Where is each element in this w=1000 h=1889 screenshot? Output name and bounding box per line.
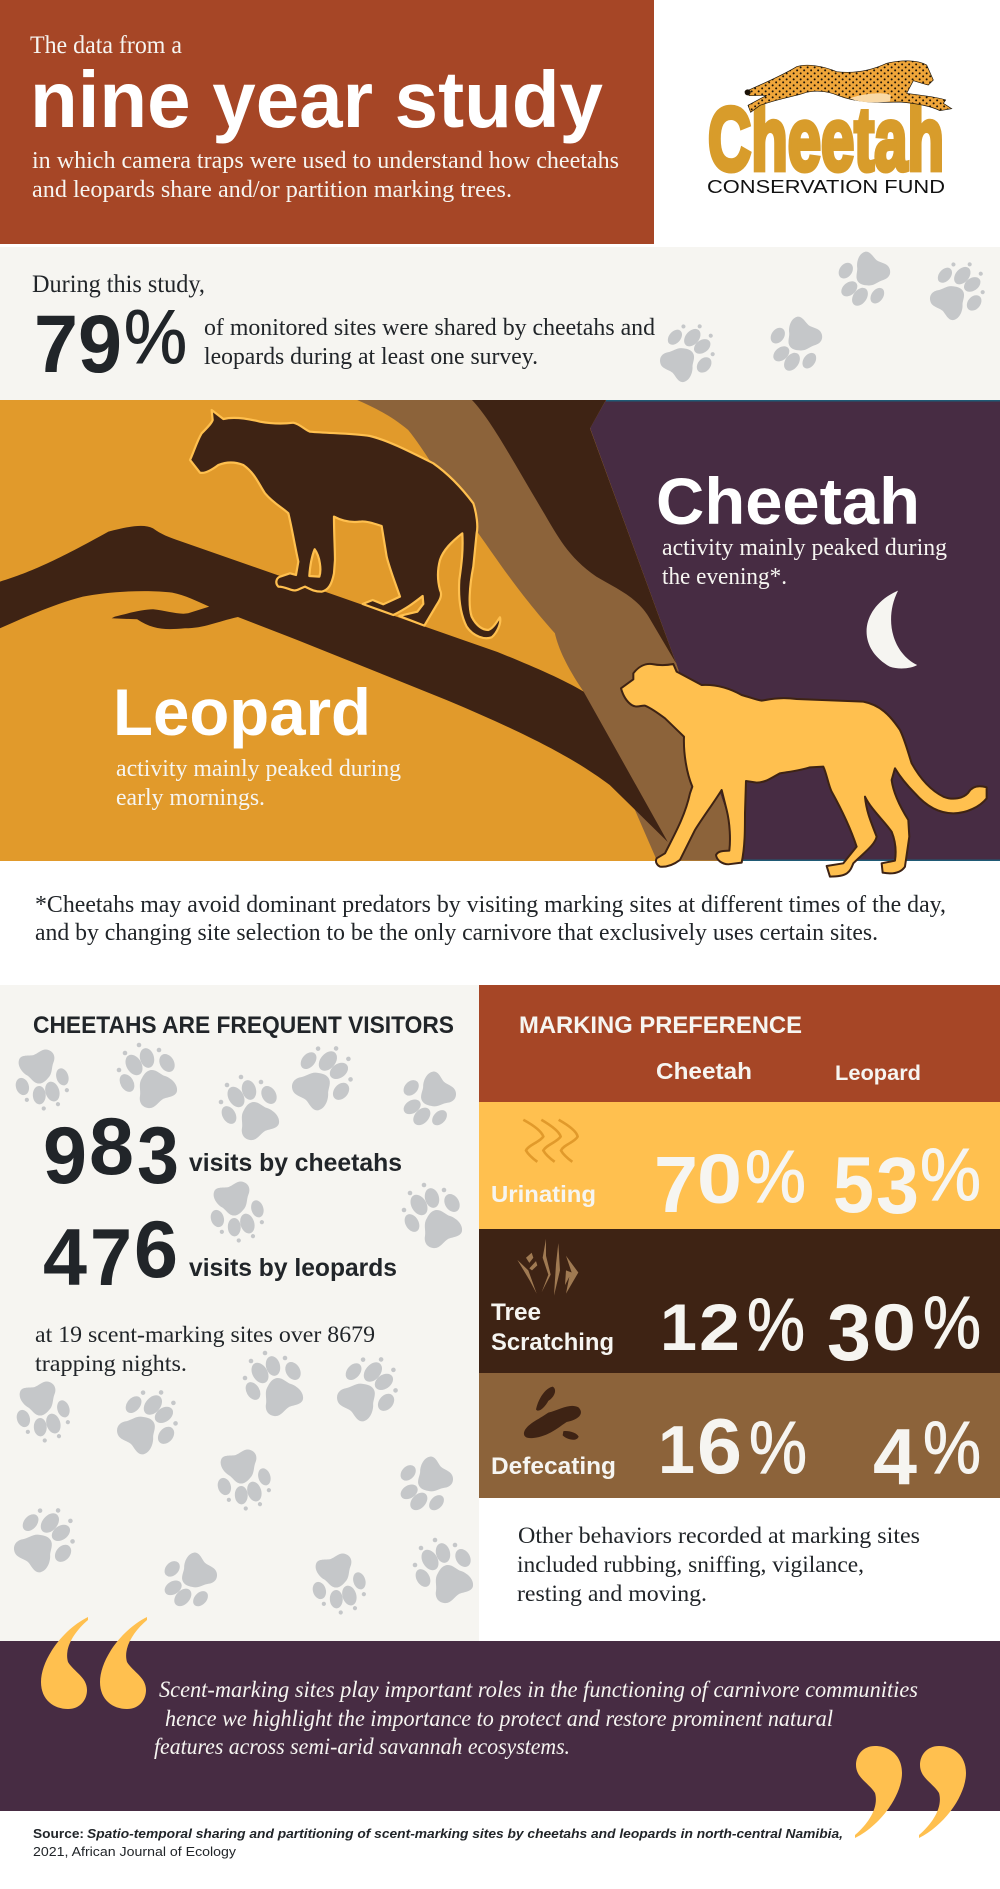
leopard value: 30% xyxy=(827,1281,981,1377)
panel: leopard and cheetah illustration xyxy=(0,400,1000,877)
stat: 476 visits: 6 xyxy=(134,1205,178,1295)
icon: scat xyxy=(524,1387,581,1440)
label: Defecating xyxy=(491,1453,616,1480)
leopard value: 53%: % xyxy=(920,1133,981,1216)
stat: 983 visits: visits by cheetahs xyxy=(189,1149,402,1177)
lead-in text: During this study, xyxy=(32,271,205,298)
column label: leopard: Leopard xyxy=(835,1062,921,1085)
cheetah description: the evening*. xyxy=(662,564,787,590)
row: defecating xyxy=(479,1373,1000,1501)
cheetah value: 70%: % xyxy=(745,1135,806,1218)
header description xyxy=(32,148,619,203)
logo tagline: CONSERVATION FUND xyxy=(707,176,945,197)
cheetah value: 70%: 0 xyxy=(697,1140,742,1218)
quote text: features across semi-arid savannah ecosystems. xyxy=(154,1734,570,1759)
leopard value: 4%: % xyxy=(923,1406,981,1489)
stat: 79%: % xyxy=(124,295,187,380)
survey details xyxy=(35,1322,375,1376)
source citation: 2021, African Journal of Ecology xyxy=(33,1844,237,1859)
stat: 476 visits: 7 xyxy=(90,1213,132,1303)
stat: 79%: 79 xyxy=(34,299,122,390)
cheetah value: 16%: 6 xyxy=(697,1402,742,1490)
leopard silhouette xyxy=(190,410,500,638)
source citation: Spatio-temporal sharing and partitioning of scent-marking sites by cheetahs and leopards in north-central Namibia, xyxy=(87,1826,843,1841)
stat description xyxy=(204,315,655,370)
logo: Cheetah Conservation Fund xyxy=(707,61,952,197)
quote text: Scent-marking sites play important roles in the functioning of carnivore communities xyxy=(159,1677,918,1702)
main title: nine year study xyxy=(30,55,603,144)
tree illustration xyxy=(0,400,743,861)
leopard value: 30%: % xyxy=(923,1281,981,1364)
label: Tree xyxy=(491,1299,541,1326)
cheetah value: 12%: % xyxy=(747,1283,805,1366)
stat: 476 visits: visits by leopards xyxy=(189,1254,397,1282)
heading: MARKING PREFERENCE xyxy=(519,1012,802,1039)
icon: opening quote mark xyxy=(41,1617,147,1709)
other behaviors text xyxy=(517,1523,920,1606)
leopard value: 30%: 0 xyxy=(872,1290,916,1364)
other behaviors text: Other behaviors recorded at marking sites xyxy=(518,1523,920,1548)
footnote: and by changing site selection to be the only carnivore that exclusively uses certain sites. xyxy=(35,920,878,946)
label xyxy=(491,1299,614,1356)
other behaviors text: resting and moving. xyxy=(517,1581,707,1606)
leopard description: activity mainly peaked during xyxy=(116,756,401,782)
moon xyxy=(867,591,917,668)
icon: claw marks xyxy=(517,1239,578,1296)
other behaviors text: included rubbing, sniffing, vigilance, xyxy=(517,1552,864,1577)
leopard heading: Leopard xyxy=(113,675,371,749)
intro line: The data from a xyxy=(30,32,182,59)
panel: marking preference xyxy=(479,985,1000,1606)
cheetah value: 12%: 1 xyxy=(660,1290,697,1364)
cheetah value: 12% xyxy=(660,1283,805,1366)
stat: 983 visits xyxy=(43,1102,402,1201)
cheetah description: activity mainly peaked during xyxy=(662,535,947,561)
stat: 983 visits: 3 xyxy=(137,1111,179,1201)
leopard value: 4% xyxy=(873,1406,981,1501)
label: Scratching xyxy=(491,1329,614,1356)
cheetah value: 70%: 7 xyxy=(654,1140,698,1229)
footnote xyxy=(35,892,946,946)
cheetah silhouette xyxy=(621,664,987,877)
header panel xyxy=(0,0,654,244)
leopard description: early mornings. xyxy=(116,785,265,811)
panel: cheetahs are frequent visitors xyxy=(0,985,479,1641)
paw prints xyxy=(3,1037,474,1619)
leopard value: 4%: 4 xyxy=(873,1412,917,1501)
leopard value: 30%: 3 xyxy=(827,1288,871,1377)
heading: CHEETAHS ARE FREQUENT VISITORS xyxy=(33,1012,454,1039)
stat description: of monitored sites were shared by cheetahs and xyxy=(204,315,655,341)
stat: 476 visits: 4 xyxy=(43,1213,87,1303)
source citation: Source: xyxy=(33,1826,84,1841)
cheetah value: 12%: 2 xyxy=(699,1290,740,1364)
paw prints xyxy=(651,245,995,388)
header description: and leopards share and/or partition marking trees. xyxy=(32,177,512,203)
footnote: *Cheetahs may avoid dominant predators by visiting marking sites at different times of the day, xyxy=(35,892,946,918)
cheetah value: 70% xyxy=(654,1135,806,1229)
cheetah value: 16% xyxy=(658,1402,807,1490)
survey details: at 19 scent-marking sites over 8679 xyxy=(35,1322,375,1347)
stat: 79% xyxy=(34,295,187,390)
cheetah value: 16%: % xyxy=(749,1406,807,1489)
quote text: hence we highlight the importance to protect and restore prominent natural xyxy=(165,1706,833,1731)
stat: 983 visits: 9 xyxy=(43,1111,87,1201)
stat description: leopards during at least one survey. xyxy=(204,344,538,370)
cheetah description xyxy=(662,535,947,590)
icon: urine waves xyxy=(523,1120,578,1162)
row: urinating xyxy=(479,1102,1000,1230)
source citation xyxy=(33,1826,843,1859)
survey details: trapping nights. xyxy=(35,1351,187,1376)
label: Urinating xyxy=(491,1181,596,1207)
quote text xyxy=(154,1677,918,1759)
column label: cheetah: Cheetah xyxy=(656,1058,752,1084)
leopard value: 53%: 3 xyxy=(876,1141,919,1230)
leopard value: 53%: 5 xyxy=(833,1140,874,1229)
icon: closing quote mark xyxy=(855,1746,966,1838)
stat: 476 visits xyxy=(43,1205,397,1303)
cheetah heading: Cheetah xyxy=(656,464,920,538)
header description: in which camera traps were used to understand how cheetahs xyxy=(32,148,619,174)
leopard description xyxy=(116,756,401,811)
logo cheetah xyxy=(745,61,952,112)
leopard value: 53% xyxy=(833,1133,981,1230)
panel: quote xyxy=(0,1617,1000,1838)
panel: 79% shared sites xyxy=(0,245,1000,400)
stat: 983 visits: 8 xyxy=(89,1102,134,1192)
cheetah value: 16%: 1 xyxy=(658,1412,695,1488)
row: tree scratching xyxy=(479,1229,1000,1377)
